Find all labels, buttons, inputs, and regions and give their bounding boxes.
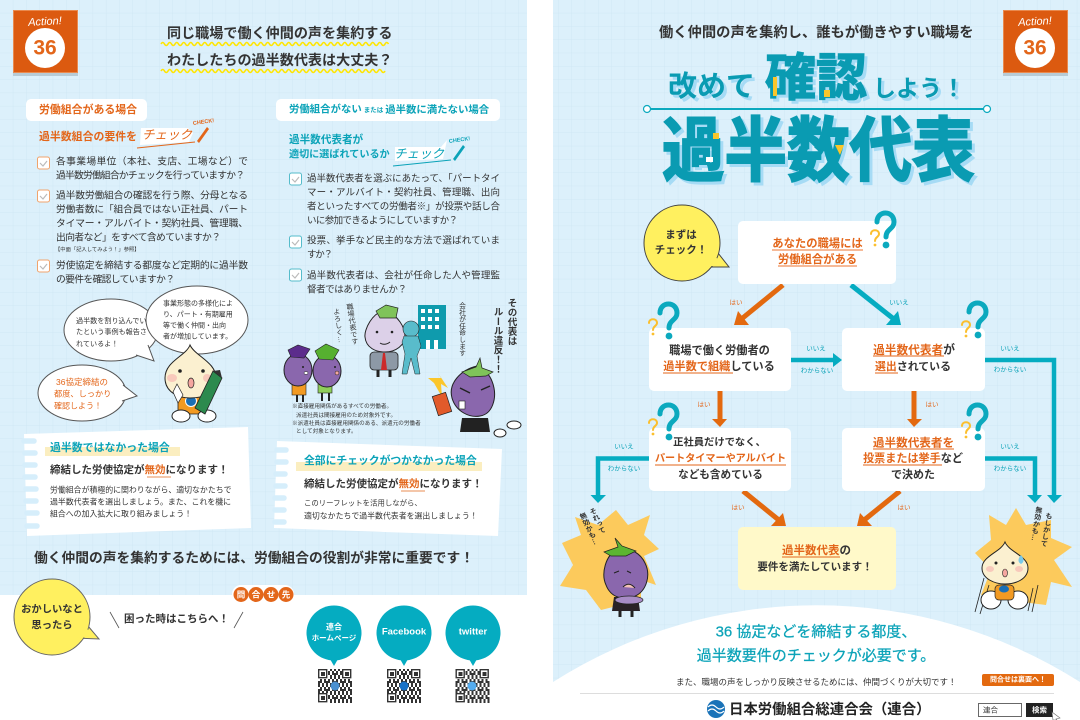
flow labels: はい (698, 400, 710, 408)
speech bubble: examples: れているよ！ (76, 340, 118, 348)
illustration: angry eggplant with card (428, 358, 521, 437)
flow box: includes part-timers: 正社員だけでなく、 (673, 436, 766, 448)
footnotes: ※直接雇用関係があるすべての労働者。 (292, 402, 392, 410)
arrow: box4 to result (743, 491, 786, 526)
bottom message: 働く仲間の声を集約するためには、労働組合の役割が非常に重要です！ (34, 550, 474, 566)
checklist item 3: 過半数代表者は、会社が任命した人や管理監 (307, 270, 500, 282)
footnotes: として対象となります。 (296, 427, 357, 435)
note: not majority: 過半数代表者を選出しましょう。また、これを機に (50, 496, 231, 506)
search box: 連合 (983, 704, 998, 714)
checklist item 2: すか？ (307, 250, 333, 260)
flow labels: わからない (994, 464, 1026, 472)
flow labels: いいえ (614, 442, 634, 450)
speech: representative greeting: 職場代表です (345, 302, 359, 345)
note: all unchecked: このリーフレットを活用しながら、 (304, 498, 422, 508)
speech: rule violation: その代表は (506, 298, 517, 346)
checklist item 2 (290, 234, 500, 260)
checklist item 3: 労使協定を締結する都度など定期的に過半数 (56, 258, 248, 272)
bubble: check first: まずは (665, 228, 697, 241)
check heading (289, 133, 471, 166)
flow box: vote: で決めた (891, 467, 935, 481)
flow box: vote: 投票または挙手など (863, 451, 963, 465)
search box (978, 703, 1060, 720)
checklist item 1 (290, 172, 500, 226)
checklist item 1: 過半数代表者を選ぶにあたって、「パートタイ (307, 172, 500, 184)
heading: left page (161, 25, 392, 72)
search box: 検索 (1032, 704, 1048, 714)
check heading: 過半数組合の要件を (39, 129, 137, 143)
flow labels: わからない (801, 366, 833, 374)
title rule (644, 106, 990, 112)
link: twitter (446, 606, 500, 703)
speech bubble: diversification: 事業形態の多様化によ (163, 298, 233, 308)
illustration: pair of eggplants (284, 344, 341, 402)
title accents lower (706, 133, 844, 162)
note: not majority (24, 427, 251, 536)
action badge right: 36 (1023, 36, 1047, 60)
action badge left: Action! (27, 15, 62, 29)
note: all unchecked (274, 441, 502, 536)
speech: right warning (1029, 505, 1054, 548)
speech bubble: diversification: 等で働く仲間・出向 (163, 320, 226, 330)
link: Rengo homepage: 連合 (326, 622, 342, 632)
starburst right (975, 508, 1072, 605)
section tag: 労働組合がない または過半数に満たない場合 (289, 102, 490, 116)
yellow bubble: contact: おかしいなと (21, 604, 83, 616)
action badge left: 36 (33, 36, 57, 60)
contact pill: 先 (282, 590, 291, 600)
flow labels: わからない (994, 366, 1026, 374)
right page subtitle: 働く仲間の声を集約し、誰もが働きやすい職場を (659, 23, 974, 41)
speech bubble: examples: たという事例も報告さ (76, 327, 147, 336)
contact-on-back pill: 問合せは裏面へ！ (990, 674, 1046, 684)
flow box: result (738, 527, 896, 590)
contact pill: 問 (237, 590, 245, 600)
flow labels (608, 298, 1026, 512)
closing note: また、職場の声をしっかり反映させるためには、仲間づくりが大切です！ (676, 677, 957, 687)
speech: left warning: 無効かも… (578, 510, 600, 546)
speech: rule violation (492, 298, 517, 374)
flow box: elected (842, 328, 985, 391)
checklist item 1 (38, 154, 248, 182)
main title line 1: 確認 (765, 50, 867, 106)
note: all unchecked: 締結した労使協定が無効になります！ (304, 477, 482, 490)
check heading: CHECK! (449, 136, 471, 145)
action badge left (13, 10, 78, 76)
title accents (773, 77, 830, 97)
check heading: CHECK! (193, 118, 215, 127)
note: not majority: 労働組合が積極的に関わりながら、適切なかたちで (50, 484, 232, 494)
yellow bubble: contact: 思ったら (31, 620, 73, 632)
checklist item 2: 過半数労働組合の確認を行う際、分母となる (56, 188, 248, 202)
speech bubble: examples: 過半数を割り込んでい (76, 316, 147, 325)
yellow bubble: contact (14, 579, 99, 655)
checklist item 1: マー・アルバイト・契約社員、管理職、出向 (307, 186, 500, 198)
arrows: flow connectors (590, 285, 1062, 526)
arrow: box4 to left character (590, 458, 649, 503)
note: all unchecked: 全部にチェックがつかなかった場合 (304, 453, 477, 467)
starburst left (560, 510, 659, 610)
flow labels: はい (730, 298, 742, 306)
note: not majority: 組合への加入拡大に取り組みましょう！ (50, 508, 192, 518)
flow box: result: 過半数代表の (782, 543, 851, 557)
checklist item 1: 者といったすべての労働者※」が投票や話し合 (307, 200, 500, 212)
speech bubble: confirm (38, 365, 137, 421)
flow box: start: 労働組合がある (778, 252, 857, 266)
question marks: box 2 (649, 304, 677, 339)
speech: representative greeting (332, 302, 359, 347)
illustration: blue person (402, 321, 421, 374)
speech bubble: confirm: 都度、しっかり (54, 388, 111, 398)
arrow: box2 to box3 (791, 353, 842, 367)
heading: left page: 同じ職場で働く仲間の声を集約する (167, 25, 392, 41)
link: Facebook (376, 606, 432, 703)
footer rule (580, 692, 1054, 694)
main title line 1: しよう！ (873, 75, 965, 101)
flow labels: はい (732, 504, 744, 512)
footnotes: ※派遣社員は直接雇用関係のある、派遣元の労働者 (292, 419, 421, 427)
left page background (0, 0, 527, 595)
flow box: vote: 過半数代表者を (873, 436, 954, 450)
checklist item 3 (38, 258, 248, 286)
section tag: 労働組合がある場合 (39, 102, 137, 116)
contact caption: 困った時はこちらへ！ (124, 612, 229, 625)
check heading: チェック (394, 147, 445, 161)
checklist item 3: の要件を確認していますか？ (56, 272, 175, 286)
flow box: organized (649, 328, 791, 391)
flow box: includes part-timers: パートタイマーやアルバイト (655, 452, 786, 464)
closing message: 過半数要件のチェックが必要です。 (697, 648, 935, 664)
check heading (39, 118, 215, 148)
main title line 1: 改めて (668, 70, 755, 103)
flow box: elected: 選出されている (875, 360, 951, 373)
contact-on-back pill (982, 674, 1054, 686)
mascot: worried eggplant (604, 538, 648, 617)
checklist item 1: 過半数労働組合かチェックを行っていますか？ (56, 168, 245, 182)
flow labels: いいえ (1000, 442, 1020, 450)
link: twitter: twitter (459, 626, 488, 638)
speech: left warning: それって (588, 507, 607, 535)
checklist item 2: タイマー・アルバイト・契約社員、管理職、 (56, 216, 248, 230)
check heading: チェック (142, 128, 193, 142)
checklist item 1: いに参加できるようにしていますか？ (307, 214, 458, 226)
mascot: onion with pencil (165, 345, 222, 422)
arrow: box3 down (907, 391, 922, 427)
speech: right warning: もしかして (1040, 512, 1053, 548)
question marks: start (871, 213, 894, 248)
note: all unchecked: 適切なかたちで過半数代表者を選出しましょう！ (304, 510, 478, 520)
speech: left warning (578, 506, 610, 546)
flow labels: はい (926, 400, 938, 408)
contact pill (232, 585, 294, 603)
speech: representative greeting: よろしく… (332, 308, 344, 343)
question marks: box 3 (962, 303, 986, 338)
link: Rengo homepage: ホームページ (312, 634, 357, 642)
mascot: worried onion (975, 542, 1038, 614)
check heading: 適切に選ばれているか (289, 148, 390, 160)
question marks: box 5 (962, 405, 986, 440)
panel: no union (276, 99, 500, 296)
main title line 1 (668, 50, 965, 106)
contact pill: 合 (252, 590, 261, 600)
speech: rule violation: ルール違反！！ (492, 307, 503, 374)
flow labels: いいえ (806, 344, 826, 352)
arrow: box3 to right character (985, 360, 1062, 503)
illustration: suited eggplant (365, 305, 405, 377)
action badge right (1003, 10, 1068, 76)
bubble: check first (644, 205, 729, 281)
closing message: 36 協定などを締結する都度、 (716, 624, 916, 640)
speech bubble: confirm: 36協定締結の (56, 377, 108, 387)
link: Rengo homepage (306, 606, 362, 703)
panel: union exists (26, 99, 248, 286)
main title line 2: 過半数代表 (662, 113, 974, 191)
footnotes: 派遣社員は間接雇用のため対象外です。 (296, 411, 396, 419)
bubble: check first: チェック！ (655, 244, 707, 256)
checklist item 2 (38, 188, 248, 253)
speech bubble: diversification: り、パート・有期雇用 (163, 310, 233, 318)
speech bubble: diversification (146, 286, 248, 354)
section tag (26, 99, 147, 121)
checklist item 3: 督者ではありませんか？ (307, 284, 407, 296)
section tag (276, 99, 500, 121)
closing message (697, 624, 935, 664)
link: Facebook: Facebook (382, 626, 427, 638)
flow box: elected: 過半数代表者が (873, 342, 955, 356)
footnotes (292, 402, 421, 435)
flow box: includes part-timers: なども含めている (678, 468, 763, 481)
checklist item 3 (290, 269, 500, 296)
speech bubble: diversification: 者が増加しています。 (163, 332, 232, 340)
check heading: 過半数代表者が (289, 133, 364, 146)
arrow: no from start (851, 285, 901, 325)
flow box: start (738, 221, 896, 284)
contact pill: せ (267, 590, 275, 600)
note: not majority: 過半数ではなかった場合 (50, 440, 170, 454)
checklist item 2: 【中面「記入してみよう！」参照】 (55, 245, 140, 253)
action badge right: Action! (1017, 15, 1052, 29)
note: not majority: 締結した労使協定が無効になります！ (50, 463, 228, 476)
white arc at bottom of right page (553, 605, 1080, 686)
flow box: start: あなたの職場には (772, 236, 863, 250)
arrow: box5 to right character (985, 458, 1042, 503)
flow labels: いいえ (1000, 344, 1020, 352)
checklist item 2: 労働者数に「組合員ではない正社員、パート (56, 202, 248, 216)
speech bubble: confirm: 確認しよう！ (54, 400, 102, 410)
flow labels: はい (898, 504, 910, 512)
flow labels: いいえ (889, 298, 909, 306)
speech: appointed by company: 会社が任命します (458, 301, 466, 357)
speech bubble: examples (64, 299, 158, 361)
flow labels: わからない (608, 464, 640, 472)
flow box: vote (842, 428, 985, 491)
flow box: includes part-timers (649, 428, 791, 491)
arrow: box5 to result (857, 491, 900, 526)
heading: left page: わたしたちの過半数代表は大丈夫？ (167, 52, 392, 68)
flow box: result: 要件を満たしています！ (757, 560, 873, 573)
organisation logo and name: 日本労働組合総連合会（連合） (729, 700, 930, 718)
arrow: yes from start (734, 285, 783, 325)
checklist item 1: 各事業場単位（本社、支店、工場など）で (56, 154, 248, 168)
flow box: organized: 職場で働く労働者の (669, 343, 770, 357)
contact caption (110, 612, 243, 628)
arrow: box2 down (712, 391, 727, 427)
speech: right warning: 無効かも… (1030, 505, 1043, 542)
checklist item 2: 出向者など」をすべて含めていますか？ (56, 230, 221, 244)
question marks: box 4 (649, 405, 677, 440)
checklist item 2: 投票、挙手など民主的な方法で選ばれていま (307, 234, 500, 246)
right page background (553, 0, 1080, 686)
illustration: company building (418, 305, 446, 349)
flow box: organized: 過半数で組織している (663, 359, 775, 373)
